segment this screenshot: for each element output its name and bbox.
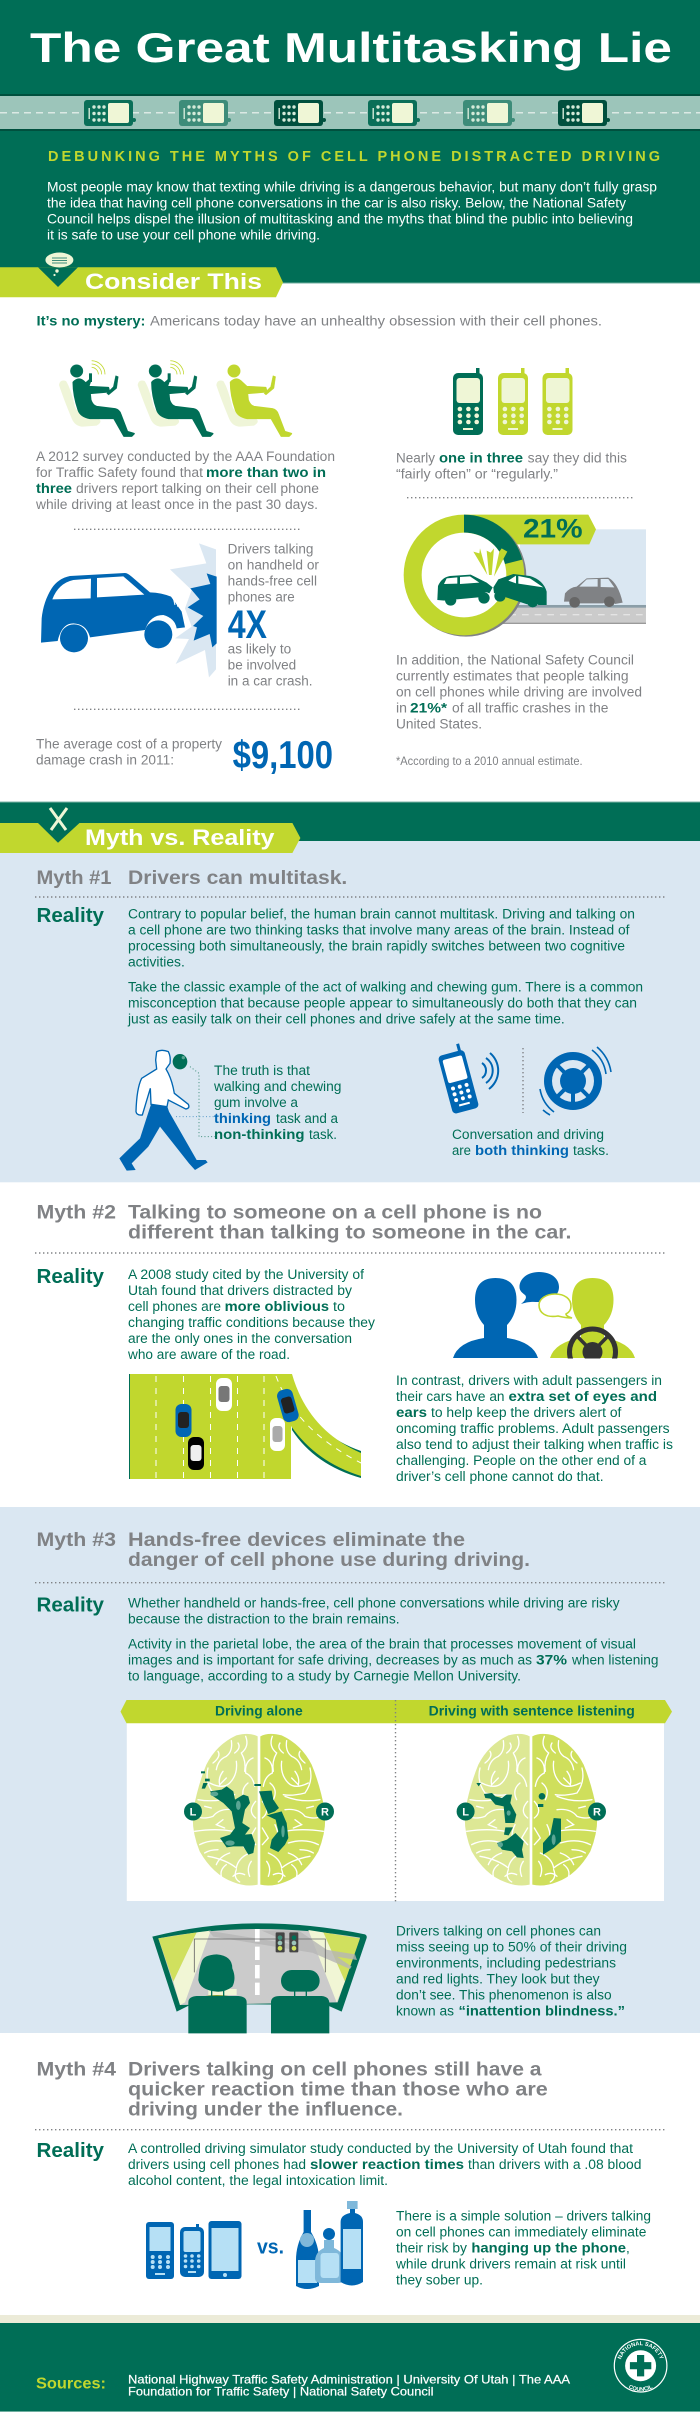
illustration: windshield view — [152, 1923, 367, 2033]
text: reality paragraphs: Contrary to popular belief, the human brain cannot multitask. Driving and talking on — [128, 906, 635, 921]
text: simple solution: on cell phones can immediately eliminate — [396, 2224, 646, 2239]
text: reality paragraphs: Take the classic example of the act of walking and chewing gum. There is a common — [128, 979, 643, 994]
intro text: the idea that having cell phone conversations in the car is also risky. Below, the National Safety — [47, 196, 626, 211]
text: source list: Foundation for Traffic Safety | National Safety Council — [128, 2384, 434, 2398]
text: study: A 2008 study cited by the University of — [128, 1267, 364, 1282]
text: both thinking tasks: Conversation and driving — [452, 1127, 604, 1142]
label: sources: Sources: — [36, 2375, 106, 2392]
text: one in three: say they did this — [528, 450, 627, 465]
text: inattention blindness: miss seeing up to 50% of their driving — [396, 1940, 627, 1955]
panel: myth 3 — [0, 1507, 700, 2033]
text: 21 percent of crashes: In addition, the National Safety Council — [396, 652, 634, 667]
logo: national safety council — [614, 2338, 668, 2393]
text: 21 percent of crashes: on cell phones while driving are involved — [396, 684, 642, 699]
chart: 21 percent ring with crash scene — [404, 515, 646, 637]
subtitle: DEBUNKING THE MYTHS OF CELL PHONE DISTRACTED DRIVING — [48, 149, 660, 165]
logo: national safety council: COUNCIL — [629, 2385, 653, 2392]
text: 21 percent of crashes: United States. — [396, 716, 482, 731]
heading: myth 2: Talking to someone on a cell phone is no — [128, 1201, 542, 1223]
text: one in three: “fairly often” or “regularly.” — [396, 466, 558, 481]
chart: brain driving alone: L — [190, 1806, 197, 1818]
text: simple solution: while drunk drivers remain at risk until — [395, 2256, 626, 2271]
text: 21 percent of crashes: of all traffic crashes in the — [452, 700, 608, 715]
text: survey — [35, 449, 335, 512]
chart: brain driving with sentence listening: L — [462, 1806, 469, 1818]
icon: three phones — [453, 368, 572, 435]
text: inattention blindness: “inattention blindness.” — [458, 2004, 625, 2019]
text: study: cell phones are — [128, 1299, 221, 1314]
text: passengers: extra set of eyes and — [508, 1389, 657, 1404]
chart: brain driving alone — [184, 1734, 334, 1886]
panel: footer — [0, 2315, 700, 2412]
text: source list: National Highway Traffic Safety Administration | University Of Utah | The AAA — [128, 2372, 570, 2386]
text: survey: three — [36, 481, 73, 496]
text: simulator study — [128, 2141, 642, 2188]
text: 4x stat: on handheld or — [228, 557, 320, 572]
text: handheld and parietal lobe: Whether handheld or hands-free, cell phone conversations while driving are risky — [128, 1596, 620, 1611]
footnote: *According to a 2010 annual estimate. — [396, 754, 583, 768]
heading: myth 1: Drivers can multitask. — [128, 867, 347, 889]
text: reality paragraphs: a cell phone are two thinking tasks that involve many areas of the brain. Instead of — [128, 922, 630, 937]
icon: thought bubble — [45, 252, 73, 276]
panel: header — [0, 0, 700, 283]
intro text — [47, 180, 657, 243]
icon: crossed swords — [50, 808, 67, 830]
text: passengers: ears — [396, 1405, 427, 1420]
text: passengers: oncoming traffic problems. Adult passengers — [396, 1421, 670, 1436]
text: crash cost: $9,100 — [233, 734, 333, 777]
text: inattention blindness: environments, including pedestrians — [396, 1956, 616, 1971]
label: driving with sentence listening: Driving with sentence listening — [429, 1704, 635, 1719]
text: inattention blindness: Drivers talking on cell phones can — [396, 1924, 601, 1939]
intro text: Council helps dispel the illusion of multitasking and the myths that blind the public into believing — [47, 212, 633, 227]
text: handheld and parietal lobe: Activity in the parietal lobe, the area of the brain that processes movement of visual — [128, 1636, 636, 1651]
text: passengers — [396, 1373, 673, 1484]
panel: brain comparison — [120, 1700, 672, 1902]
text: both thinking tasks: both thinking — [475, 1143, 569, 1158]
road with phones — [0, 94, 700, 131]
text: 21 percent of crashes: in — [396, 700, 407, 715]
text: reality paragraphs: just as easily talk on their cell phones and drive safely at the same time. — [127, 1011, 565, 1026]
title: The Great Multitasking Lie — [30, 24, 672, 71]
label: 21 percent: 21% — [523, 514, 583, 544]
text: both thinking tasks: tasks. — [573, 1143, 609, 1158]
panel: consider this content — [35, 314, 646, 777]
text: 4x stat: phones are — [228, 589, 295, 604]
text: inattention blindness — [396, 1924, 627, 2019]
text: 4x stat — [228, 541, 320, 688]
text: simulator study: than drivers with a .08 blood — [468, 2157, 642, 2172]
heading: myth 4: Drivers talking on cell phones still have a — [128, 2059, 542, 2081]
text: thinking and non-thinking: The truth is that — [214, 1063, 310, 1078]
text: thinking and non-thinking: non-thinking — [214, 1127, 304, 1142]
heading: myth 4: Myth #4 — [36, 2059, 116, 2081]
text: inattention blindness: don’t see. This phenomenon is also — [396, 1988, 612, 2003]
label: driving alone: Driving alone — [215, 1704, 303, 1719]
text: 21 percent of crashes: 21%* — [410, 700, 448, 715]
text: passengers: driver’s cell phone cannot do that. — [396, 1469, 604, 1484]
text: both thinking tasks — [452, 1127, 609, 1158]
text: passengers: challenging. People on the other end of a — [396, 1453, 647, 1468]
heading: myth 2: Myth #2 — [36, 1201, 116, 1223]
chart: brain driving with sentence listening — [457, 1734, 606, 1886]
text: study: to — [333, 1299, 345, 1314]
panel: myth 4 — [35, 2059, 665, 2289]
text: survey: more than two in — [206, 465, 326, 480]
chart: brain driving with sentence listening: R — [593, 1806, 601, 1818]
text: one in three: one in three — [439, 450, 524, 465]
heading: myth 4 — [36, 2059, 548, 2121]
panel: myth 1 — [0, 802, 700, 1182]
heading: myth 4: quicker reaction time than those who are — [128, 2079, 548, 2101]
text: study — [127, 1267, 375, 1362]
banner: myth vs reality — [0, 808, 300, 853]
text: handheld and parietal lobe: to language, according to a study by Carnegie Mellon University. — [128, 1668, 521, 1683]
icon: walking man chewing gum — [119, 1050, 215, 1171]
panel: myth 2 — [35, 1201, 673, 1484]
text: both thinking tasks: are — [452, 1143, 471, 1158]
text: 21 percent of crashes: currently estimates that people talking — [396, 668, 629, 683]
text: thinking and non-thinking: task. — [309, 1127, 337, 1142]
text: passengers: their cars have an — [396, 1389, 504, 1404]
icon: bottles — [296, 2201, 363, 2289]
heading: myth 4: driving under the influence. — [128, 2099, 403, 2121]
text: inattention blindness: known as — [396, 2004, 454, 2019]
text: inattention blindness: and red lights. They look but they — [396, 1972, 600, 1987]
text: handheld and parietal lobe — [128, 1596, 658, 1683]
text: 4x stat: in a car crash. — [228, 673, 312, 688]
text: crash cost: damage crash in 2011: — [36, 752, 174, 767]
lead sentence: Americans today have an unhealthy obsession with their cell phones. — [150, 314, 602, 328]
text: source list — [128, 2372, 570, 2398]
heading: myth 3: Hands-free devices eliminate the — [128, 1529, 465, 1551]
heading: myth 3 — [36, 1529, 530, 1571]
logo: national safety council: NATIONAL SAFETY — [618, 2341, 664, 2360]
text: thinking and non-thinking: thinking — [214, 1111, 271, 1126]
lead sentence: It’s no mystery: — [36, 314, 146, 328]
text: thinking and non-thinking: walking and chewing — [213, 1079, 342, 1094]
text: handheld and parietal lobe: images and is important for safe driving, decreases by as much as — [128, 1652, 532, 1667]
text: handheld and parietal lobe: 37% — [536, 1652, 567, 1667]
illustration: highway exit — [129, 1374, 361, 1479]
text: thinking and non-thinking — [213, 1063, 342, 1142]
text: passengers: also tend to adjust their talking when traffic is — [396, 1437, 673, 1452]
text: 4x stat: hands-free cell — [228, 573, 317, 588]
text: crash cost: The average cost of a property — [36, 736, 222, 751]
text: thinking and non-thinking: task and a — [276, 1111, 338, 1126]
heading: myth 2 — [36, 1201, 571, 1243]
text: handheld and parietal lobe: because the distraction to the brain remains. — [128, 1612, 400, 1627]
heading: Consider This — [85, 269, 262, 294]
heading: myth 1 — [36, 867, 347, 889]
text: survey: drivers report talking on their cell phone — [76, 481, 319, 496]
icon: phones — [146, 2221, 242, 2279]
heading: myth 1: Myth #1 — [36, 867, 112, 889]
text: survey: A 2012 survey conducted by the AAA Foundation — [36, 449, 335, 464]
text: 4x stat: 4X — [228, 603, 267, 647]
text: reality paragraphs: activities. — [128, 954, 185, 969]
text: simple solution — [395, 2208, 651, 2287]
text: simple solution: , — [626, 2240, 630, 2255]
text: simple solution: hanging up the phone — [471, 2240, 627, 2255]
text: passengers: In contrast, drivers with adult passengers in — [396, 1373, 662, 1388]
text: reality paragraphs: misconception that because people appear to simultaneously do both that they can — [128, 995, 637, 1010]
text: simple solution: their risk by — [396, 2240, 467, 2255]
text: simulator study: alcohol content, the legal intoxication limit. — [128, 2173, 388, 2188]
intro text: it is safe to use your cell phone while driving. — [47, 228, 320, 243]
heading: myth 3: Myth #3 — [36, 1529, 116, 1551]
icon: drivers — [59, 361, 291, 436]
text: one in three: Nearly — [396, 450, 435, 465]
chart: brain driving alone: R — [321, 1806, 329, 1818]
text: 4x stat: Drivers talking — [228, 541, 313, 556]
text: thinking and non-thinking: gum involve a — [214, 1095, 298, 1110]
text: passengers: to help keep the drivers alert of — [431, 1405, 622, 1420]
heading: myth 3: danger of cell phone use during driving. — [128, 1549, 530, 1571]
banner: myth vs reality: Myth vs. Reality — [85, 825, 275, 850]
text: simulator study: drivers using cell phones had — [128, 2157, 306, 2172]
text: one in three — [396, 450, 627, 481]
text: 21 percent of crashes — [396, 652, 642, 731]
text: handheld and parietal lobe: when listening — [571, 1652, 658, 1667]
text: study: more oblivious — [225, 1299, 329, 1314]
label: reality: Reality — [36, 1265, 105, 1288]
label: vs: vs. — [257, 2236, 284, 2258]
intro text: Most people may know that texting while driving is a dangerous behavior, but many don’t fully grasp — [47, 180, 657, 195]
text: crash cost — [36, 734, 333, 777]
text: study: who are aware of the road. — [127, 1347, 290, 1362]
text: reality paragraphs — [127, 906, 643, 1026]
text: simple solution: There is a simple solution – drivers talking — [396, 2208, 651, 2223]
text: 4x stat: be involved — [228, 657, 296, 672]
banner: consider this — [0, 252, 700, 297]
text: simple solution: they sober up. — [396, 2272, 483, 2287]
text: study: are the only ones in the conversation — [128, 1331, 352, 1346]
text: simulator study: A controlled driving simulator study conducted by the University of Utah found that — [128, 2141, 633, 2156]
icon: cell phone — [436, 1043, 498, 1114]
label: reality: Reality — [36, 2139, 105, 2162]
icon: conversation silhouettes — [453, 1272, 635, 1380]
text: reality paragraphs: processing both simultaneously, the brain rapidly switches between two cognitive — [128, 938, 625, 953]
label: reality: Reality — [36, 904, 105, 927]
icon: car crash — [41, 543, 217, 677]
text: study: changing traffic conditions because they — [128, 1315, 375, 1330]
text: survey: while driving at least once in the past 30 days. — [35, 497, 318, 512]
heading: myth 2: different than talking to someone in the car. — [128, 1221, 571, 1243]
icon: steering wheel — [540, 1047, 611, 1115]
text: study: Utah found that drivers distracted by — [128, 1283, 352, 1298]
text: simulator study: slower reaction times — [310, 2157, 464, 2172]
label: reality: Reality — [36, 1594, 105, 1617]
text: 4x stat: as likely to — [228, 641, 291, 656]
text: survey: for Traffic Safety found that — [36, 465, 203, 480]
